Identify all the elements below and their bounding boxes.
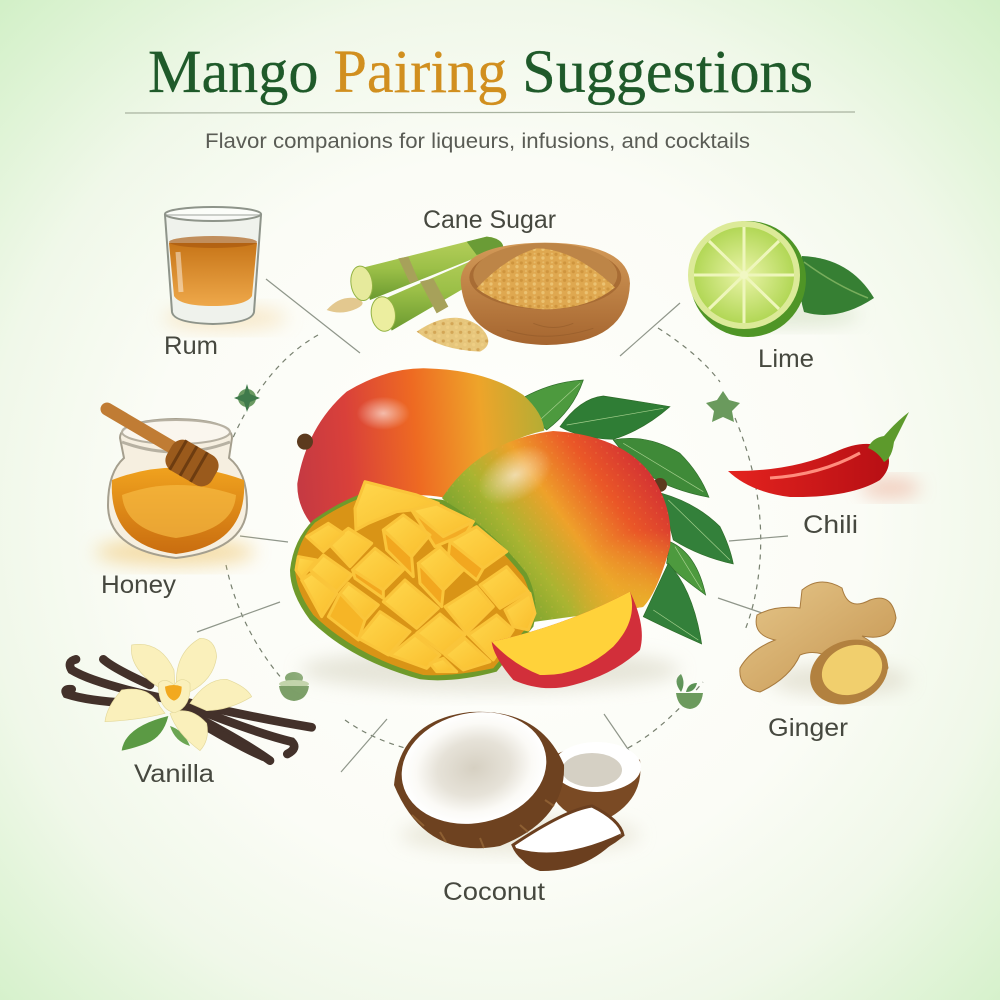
connector lines <box>197 279 788 772</box>
illustration: honey jar with dipper <box>95 409 255 566</box>
front mango <box>442 431 671 622</box>
illustration: lime with leaf <box>688 221 874 337</box>
mango stem <box>653 478 667 492</box>
mango slice <box>492 592 642 688</box>
dashed connecting ring <box>226 328 761 748</box>
icon: rum star badge <box>234 384 260 412</box>
label: Honey: Honey <box>101 571 177 599</box>
title: Mango Pairing Suggestions <box>148 39 813 106</box>
label: Vanilla: Vanilla <box>134 760 214 788</box>
illustration: central mangoes <box>290 368 733 692</box>
icon: lime star badge <box>706 391 740 422</box>
label: Coconut: Coconut <box>443 878 545 906</box>
illustration: vanilla flower and pods <box>66 638 312 761</box>
label: Cane Sugar: Cane Sugar <box>423 206 556 234</box>
icon: vanilla bowl <box>279 672 309 701</box>
label: Chili: Chili <box>803 511 858 539</box>
label: Rum: Rum <box>164 332 218 360</box>
illustration: cane sugar <box>327 237 630 352</box>
cut mango flesh <box>295 498 531 675</box>
cut mango rind <box>290 495 536 680</box>
back mango <box>297 368 544 527</box>
mango cubes <box>296 482 535 672</box>
label: Lime: Lime <box>758 345 814 373</box>
illustration: chili pepper <box>728 412 920 498</box>
subtitle: Flavor companions for liqueurs, infusions, and cocktails <box>205 130 750 153</box>
icon: ginger plant bowl <box>676 674 703 709</box>
illustration: ginger root <box>740 582 910 716</box>
illustration: coconut <box>391 699 641 871</box>
leaves <box>525 380 733 644</box>
illustration: rum glass <box>163 207 287 330</box>
label: Ginger: Ginger <box>768 714 848 742</box>
